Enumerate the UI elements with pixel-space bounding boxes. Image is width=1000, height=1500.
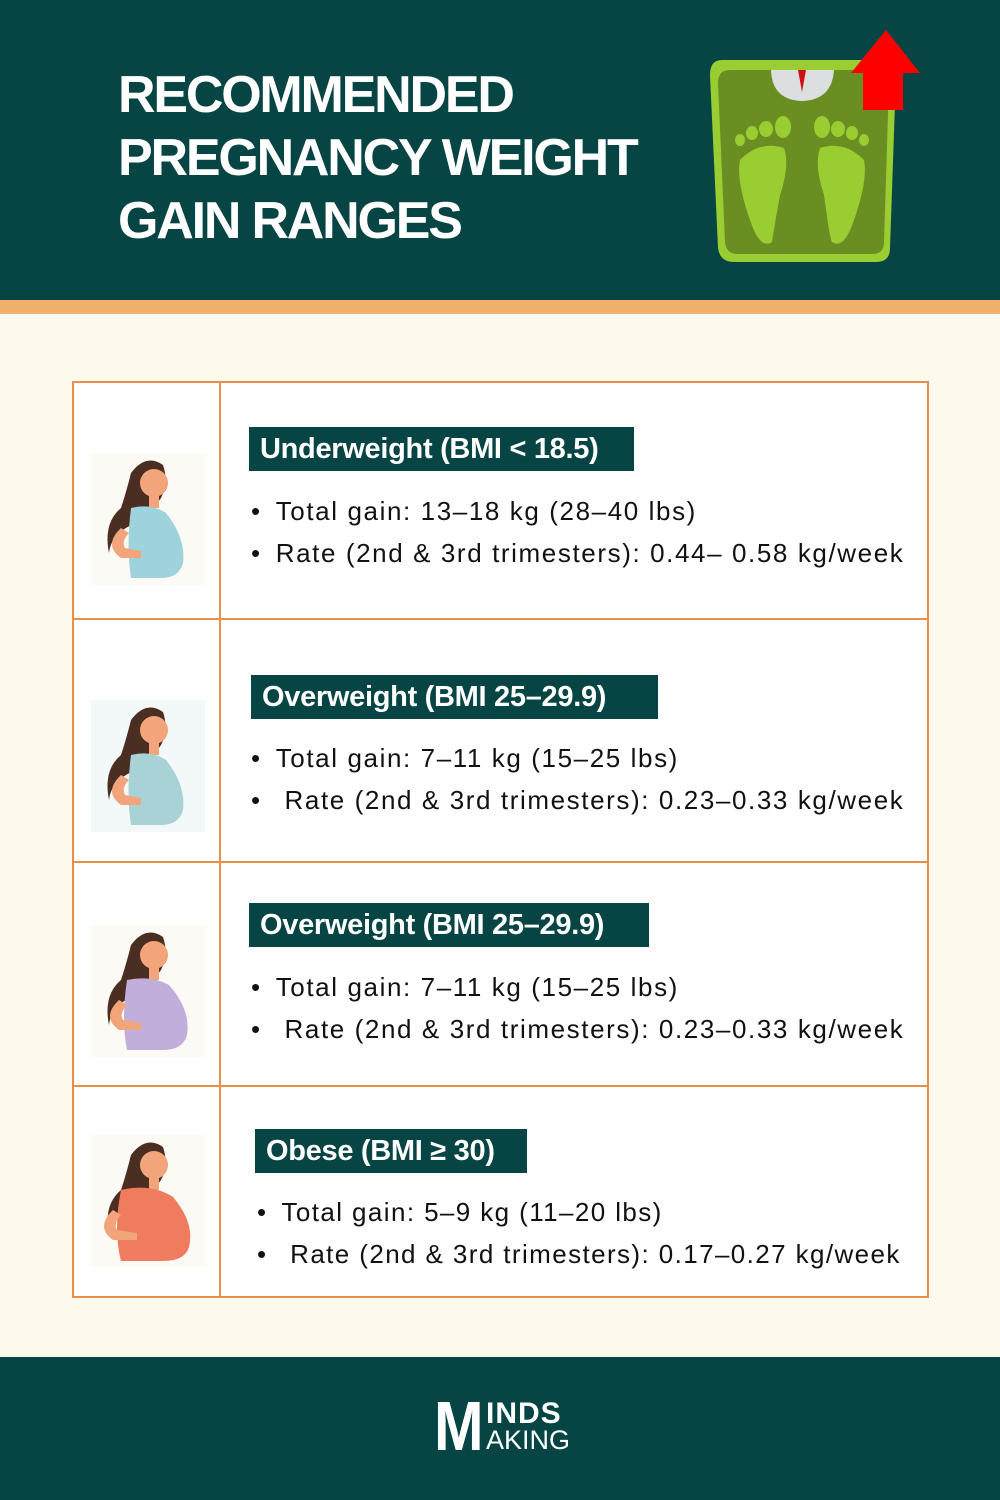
- label: [255, 1129, 527, 1173]
- row 2: overweight: [74, 620, 927, 863]
- table: [72, 381, 929, 1298]
- bullets: [258, 1197, 901, 1269]
- logo: Minds Making: AKING: [486, 1425, 570, 1455]
- label: Obese (BMI ≥ 30): [266, 1135, 495, 1167]
- footer: [0, 1357, 1000, 1500]
- figure: woman in blue: [91, 453, 205, 585]
- title: GAIN RANGES: [118, 192, 461, 250]
- label: [249, 427, 634, 471]
- bullets: Total gain: 13–18 kg (28–40 lbs): [276, 496, 697, 526]
- bullets: Rate (2nd & 3rd trimesters): 0.44– 0.58 kg/week: [276, 538, 904, 568]
- logo: Minds Making: M: [434, 1387, 484, 1465]
- header band: [0, 0, 1000, 300]
- bullets: Rate (2nd & 3rd trimesters): 0.23–0.33 kg/week: [285, 1014, 904, 1044]
- row 1: underweight: [74, 383, 927, 620]
- bullets: Total gain: 5–9 kg (11–20 lbs): [282, 1197, 663, 1227]
- bullets: Rate (2nd & 3rd trimesters): 0.23–0.33 kg/week: [285, 785, 904, 815]
- bullets: Rate (2nd & 3rd trimesters): 0.17–0.27 kg/week: [290, 1239, 901, 1269]
- figure: woman in purple: [91, 925, 205, 1057]
- label: [249, 903, 649, 947]
- bullets: [252, 743, 904, 815]
- bullets: [252, 496, 904, 568]
- title: PREGNANCY WEIGHT: [118, 129, 637, 187]
- label: [251, 675, 658, 719]
- label: Overweight (BMI 25–29.9): [262, 681, 606, 713]
- label: Underweight (BMI < 18.5): [260, 433, 598, 465]
- row 4: obese: [91, 1129, 901, 1269]
- bullets: Total gain: 7–11 kg (15–25 lbs): [276, 972, 679, 1002]
- title: [118, 66, 638, 250]
- figure: woman in teal: [91, 700, 205, 832]
- figure: woman in coral: [91, 1135, 205, 1267]
- row 3: overweight: [74, 863, 927, 1087]
- bullets: [252, 972, 904, 1044]
- title: RECOMMENDED: [118, 66, 513, 124]
- logo: Minds Making: [434, 1387, 570, 1465]
- bullets: Total gain: 7–11 kg (15–25 lbs): [276, 743, 679, 773]
- label: Overweight (BMI 25–29.9): [260, 909, 604, 941]
- logo: Minds Making: INDS: [486, 1397, 562, 1430]
- icon: bathroom scale with arrow: [710, 30, 920, 262]
